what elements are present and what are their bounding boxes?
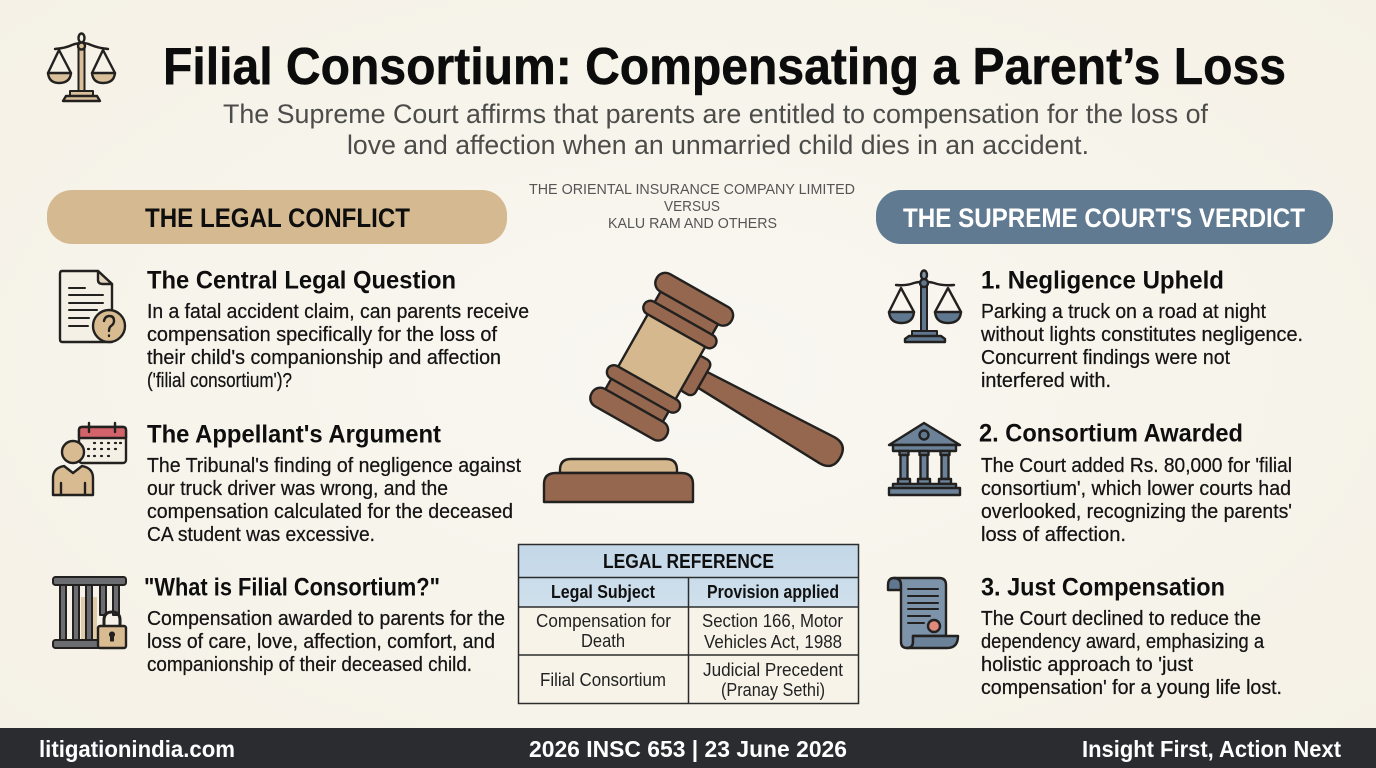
text block: what is filial consortium bbox=[144, 574, 505, 676]
table: legal reference: (Pranay Sethi) bbox=[721, 680, 825, 700]
text block: negligence upheld: Concurrent findings were not bbox=[981, 347, 1230, 369]
subtitle bbox=[223, 99, 1208, 160]
text block: the central legal question: In a fatal accident claim, can parents receive bbox=[147, 301, 529, 323]
icon: jail bars with padlock bbox=[53, 577, 126, 648]
panel heading: the legal conflict: THE LEGAL CONFLICT bbox=[145, 203, 410, 233]
panel heading: the legal conflict bbox=[47, 190, 507, 244]
footer bar: Insight First, Action Next bbox=[1082, 736, 1341, 762]
text block: the central legal question: ('filial consortium')? bbox=[147, 370, 292, 392]
text block: the central legal question: compensation specifically for the loss of bbox=[147, 324, 497, 346]
case parties: THE ORIENTAL INSURANCE COMPANY LIMITED bbox=[529, 181, 855, 198]
text block: just compensation: dependency award, emphasizing a bbox=[981, 631, 1265, 653]
table: legal reference: LEGAL REFERENCE bbox=[603, 551, 774, 573]
text block: the central legal question: The Central Legal Question bbox=[147, 266, 456, 294]
case parties bbox=[529, 181, 855, 232]
text block: the appellant's argument: The Tribunal's finding of negligence against bbox=[147, 455, 521, 477]
table: legal reference: Death bbox=[581, 631, 625, 651]
text block: negligence upheld: without lights constitutes negligence. bbox=[980, 324, 1303, 346]
text block: consortium awarded: loss of affection. bbox=[981, 524, 1126, 546]
table: legal reference: Provision applied bbox=[707, 582, 839, 602]
text block: just compensation bbox=[981, 574, 1282, 699]
text block: the appellant's argument: compensation calculated for the deceased bbox=[147, 501, 513, 523]
text block: just compensation: 3. Just Compensation bbox=[981, 574, 1225, 602]
text block: consortium awarded: 2. Consortium Awarded bbox=[979, 420, 1243, 448]
text block: consortium awarded: overlooked, recognizing the parents' bbox=[981, 501, 1292, 523]
panel heading: the supreme court's verdict: THE SUPREME COURT'S VERDICT bbox=[903, 203, 1305, 233]
text block: just compensation: compensation' for a young life lost. bbox=[981, 677, 1282, 699]
table: legal reference bbox=[518, 544, 858, 704]
text block: the central legal question: their child's companionship and affection bbox=[147, 347, 501, 369]
text block: the central legal question bbox=[147, 266, 529, 392]
text block: what is filial consortium: "What is Filial Consortium?" bbox=[144, 574, 440, 602]
text block: the appellant's argument: The Appellant's Argument bbox=[147, 420, 442, 448]
case parties: KALU RAM AND OTHERS bbox=[608, 215, 777, 232]
table: legal reference: Compensation for bbox=[536, 611, 671, 631]
title: Filial Consortium: Compensating a Parent’s Loss bbox=[163, 38, 1286, 96]
subtitle: love and affection when an unmarried child dies in an accident. bbox=[347, 130, 1089, 160]
text block: what is filial consortium: loss of care, love, affection, comfort, and bbox=[147, 631, 495, 653]
table: legal reference: Vehicles Act, 1988 bbox=[704, 632, 842, 652]
icon: scroll with seal bbox=[888, 578, 958, 648]
text block: just compensation: holistic approach to 'just bbox=[981, 654, 1193, 676]
icon: header scales of justice bbox=[48, 34, 115, 101]
illustration: gavel and sound block bbox=[544, 269, 878, 524]
icon: document with question mark bbox=[60, 271, 125, 342]
panel heading: the supreme court's verdict bbox=[876, 190, 1333, 244]
table: legal reference: Section 166, Motor bbox=[702, 611, 843, 631]
text block: the appellant's argument bbox=[147, 420, 521, 546]
footer bar: 2026 INSC 653 | 23 June 2026 bbox=[529, 736, 847, 762]
table: legal reference: Filial Consortium bbox=[540, 670, 666, 690]
text block: negligence upheld: interfered with. bbox=[981, 370, 1111, 392]
subtitle: The Supreme Court affirms that parents are entitled to compensation for the loss of bbox=[223, 99, 1208, 129]
text block: just compensation: The Court declined to reduce the bbox=[981, 608, 1261, 630]
text block: consortium awarded: consortium', which lower courts had bbox=[981, 478, 1291, 500]
text block: the appellant's argument: CA student was excessive. bbox=[147, 524, 375, 546]
text block: what is filial consortium: companionship of their deceased child. bbox=[147, 654, 472, 676]
case parties: VERSUS bbox=[664, 198, 720, 215]
table: legal reference: Judicial Precedent bbox=[703, 660, 843, 680]
text block: what is filial consortium: Compensation awarded to parents for the bbox=[147, 608, 505, 630]
text block: the appellant's argument: our truck driver was wrong, and the bbox=[147, 478, 448, 500]
footer bar: litigationindia.com bbox=[39, 736, 235, 762]
footer bar bbox=[0, 728, 1376, 768]
text block: consortium awarded bbox=[979, 420, 1292, 546]
text block: negligence upheld bbox=[980, 266, 1303, 392]
icon: person with calendar bbox=[53, 423, 126, 495]
text block: negligence upheld: 1. Negligence Upheld bbox=[981, 266, 1224, 294]
table: legal reference: Legal Subject bbox=[551, 582, 655, 602]
text block: consortium awarded: The Court added Rs. 80,000 for 'filial bbox=[981, 455, 1292, 477]
icon: verdict scales of justice bbox=[889, 270, 961, 342]
text block: negligence upheld: Parking a truck on a road at night bbox=[981, 301, 1266, 323]
icon: courthouse bbox=[889, 423, 960, 495]
